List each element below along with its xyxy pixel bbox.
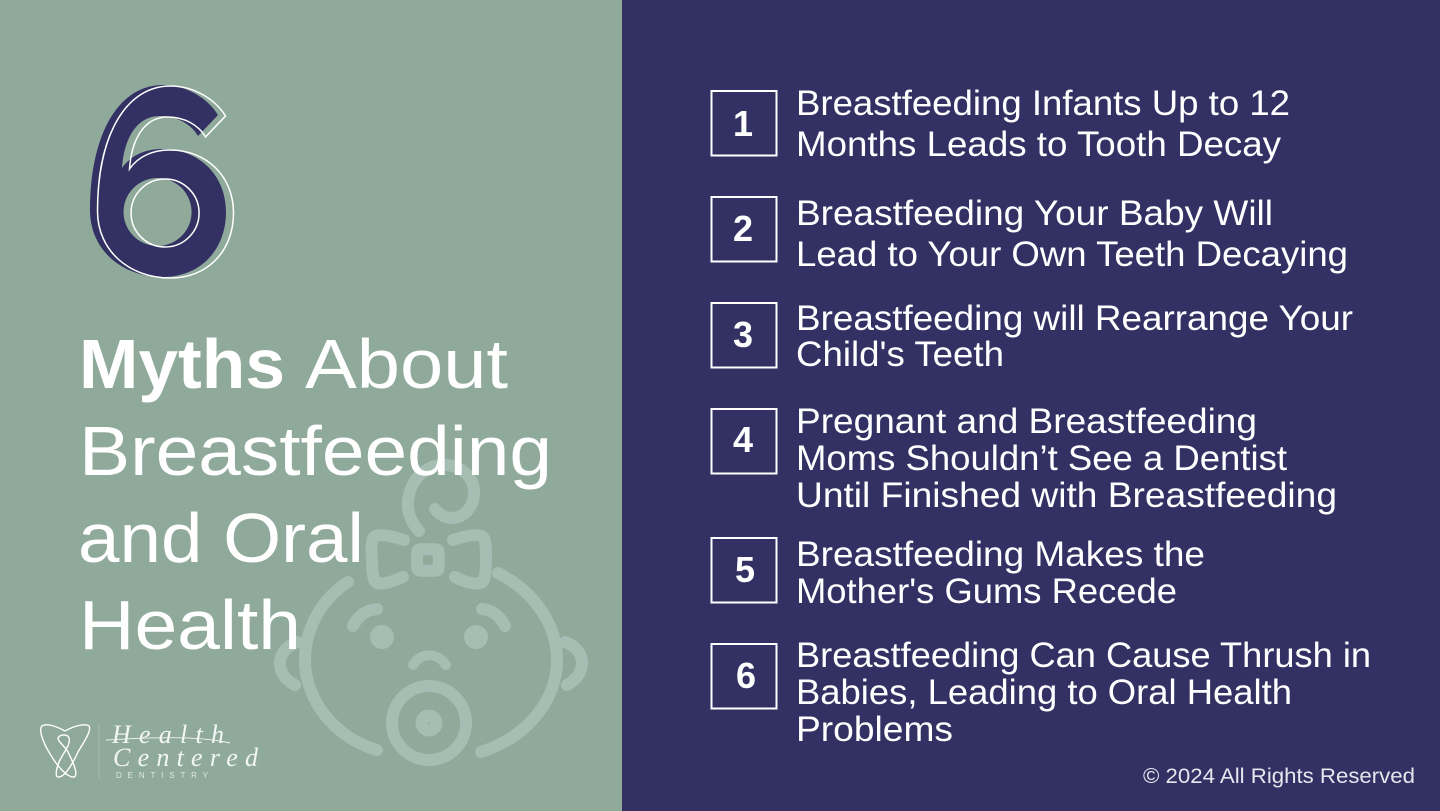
item text 3: Breastfeeding will Rearrange Your (796, 299, 1353, 338)
item text 5: Breastfeeding Makes the (796, 535, 1205, 574)
heading: Myths About Breastfeeding and Oral Health: Health (79, 586, 301, 664)
icon: baby face with bow watermark (280, 465, 582, 760)
number 6: 6 (736, 655, 756, 696)
item text 2 (796, 194, 1348, 274)
item text 1 (796, 84, 1290, 164)
logo wordmark (106, 720, 259, 780)
item text 4 (796, 402, 1337, 515)
list item 2 (712, 194, 1348, 274)
panel: left green background (0, 0, 622, 811)
logo wordmark: Centered (113, 743, 259, 772)
divider line (98, 724, 100, 778)
list item 3 (712, 299, 1353, 374)
item text 6: Breastfeeding Can Cause Thrush in (796, 636, 1371, 675)
item text 2: Breastfeeding Your Baby Will (796, 194, 1273, 233)
list item 5 (712, 535, 1205, 611)
item text 4: Moms Shouldn’t See a Dentist (796, 439, 1287, 478)
number 4: 4 (733, 419, 753, 460)
item text 4: Until Finished with Breastfeeding (796, 476, 1337, 515)
item text 1: Months Leads to Tooth Decay (796, 125, 1282, 164)
icon: large numeral 6 with offset outline (90, 85, 234, 278)
number box 2 (712, 197, 776, 262)
copyright notice: © 2024 All Rights Reserved (1143, 765, 1415, 788)
number 1: 1 (733, 103, 753, 144)
item text 5 (796, 535, 1205, 611)
heading: Myths About Breastfeeding and Oral Health: About (305, 325, 508, 403)
item text 3: Child's Teeth (796, 335, 1004, 374)
number box 6 (712, 644, 776, 708)
number 2: 2 (733, 208, 753, 249)
icon: tooth and ribbon logo mark (41, 725, 90, 777)
item text 6: Problems (796, 710, 953, 749)
logo wordmark: DENTISTRY (116, 771, 209, 780)
number 5: 5 (735, 549, 755, 590)
item text 4: Pregnant and Breastfeeding (796, 402, 1257, 441)
number box 4 (712, 409, 776, 474)
panel: right navy background (622, 0, 1440, 811)
logo: Health Centered Dentistry (41, 720, 259, 780)
number box 1 (712, 91, 776, 156)
list item 6 (712, 636, 1371, 749)
logo wordmark: Health (111, 720, 224, 749)
item text 6: Babies, Leading to Oral Health (796, 673, 1292, 712)
number box 3 (712, 303, 776, 368)
item text 2: Lead to Your Own Teeth Decaying (796, 235, 1348, 274)
list item 1 (712, 84, 1290, 164)
number 3: 3 (733, 314, 753, 355)
number box 5 (712, 538, 776, 602)
heading: Myths About Breastfeeding and Oral Health: and Oral (78, 499, 364, 577)
item text 3 (796, 299, 1353, 374)
heading: Myths About Breastfeeding and Oral Health: Breastfeeding (79, 412, 552, 490)
list item 4 (712, 402, 1337, 515)
item text 6 (796, 636, 1371, 749)
heading: Myths About Breastfeeding and Oral Health: Myths (79, 325, 285, 403)
item text 5: Mother's Gums Recede (796, 572, 1177, 611)
heading: Myths About Breastfeeding and Oral Health (78, 325, 552, 664)
item text 1: Breastfeeding Infants Up to 12 (796, 84, 1290, 123)
